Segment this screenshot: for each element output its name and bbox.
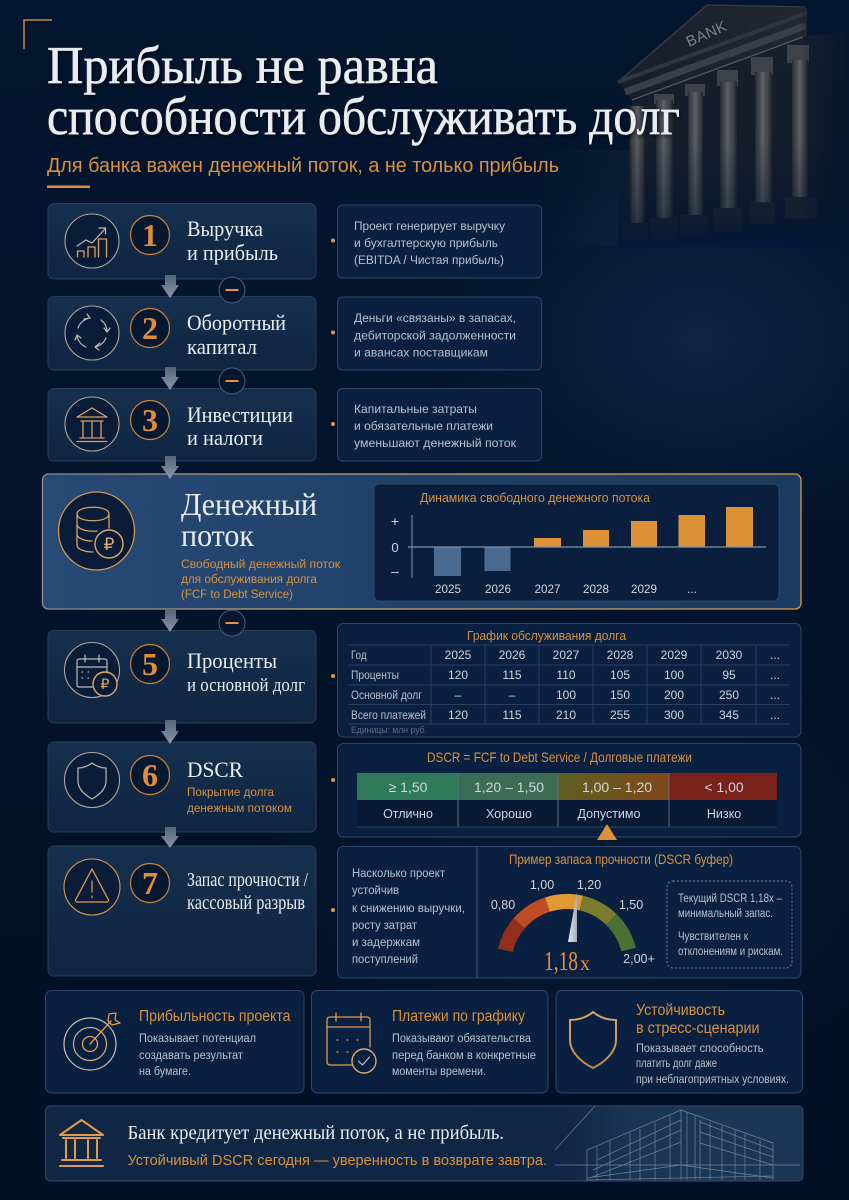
table: payments: 210 <box>556 708 576 722</box>
gauge: DSCR 1.18x: 1,20 <box>577 878 601 892</box>
table: payments: 120 <box>448 708 468 722</box>
table: payments: 95 <box>722 668 736 682</box>
table: DSCR ranges: Низко <box>707 807 741 821</box>
card: stress resilience: Показывает способность <box>636 1043 764 1055</box>
step 1 card: 1 <box>142 217 158 253</box>
panel: safety margin: к снижению выручки, <box>352 901 465 915</box>
table: payments: Проценты <box>351 668 399 682</box>
table: DSCR ranges: 1,00 – 1,20 <box>582 779 652 795</box>
table: payments: 100 <box>664 668 684 682</box>
card: project profitability: Прибыльность проекта <box>139 1008 291 1025</box>
gauge: DSCR 1.18x <box>491 878 655 976</box>
image: bank building <box>540 0 849 247</box>
step 3 card: и налоги <box>187 425 263 450</box>
step 2 note: Деньги «связаны» в запасах, <box>354 311 516 325</box>
gauge: DSCR 1.18x: 2,00+ <box>623 952 655 966</box>
image: wireframe building <box>555 1106 800 1180</box>
step 7 card: 7 <box>142 865 158 901</box>
step 6 card <box>48 742 316 832</box>
step 3 note: уменьшают денежный поток <box>354 436 517 450</box>
panel: debt service schedule: Единицы: млн руб. <box>351 725 427 736</box>
table: DSCR ranges: Допустимо <box>578 807 641 821</box>
chart: free cash flow: 2028 <box>583 582 609 596</box>
step 1 card: Выручка <box>187 216 263 241</box>
gauge: DSCR 1.18x: 1,00 <box>530 878 554 892</box>
arrow: step 2 to 3 <box>161 367 179 390</box>
table: payments: 250 <box>719 688 739 702</box>
gauge: DSCR 1.18x: 1,50 <box>619 898 643 912</box>
icon: growth chart <box>65 214 119 268</box>
step 2 note: и авансах поставщикам <box>354 346 488 360</box>
step 5 card: Проценты <box>187 648 277 673</box>
card: project profitability: Показывает потенциал <box>139 1033 256 1045</box>
minus sign 1 <box>219 277 245 303</box>
table: payments: 2027 <box>553 648 580 662</box>
step 2 card: 2 <box>142 310 158 346</box>
subtitle: Для банка важен денежный поток, а не только прибыль <box>47 155 559 177</box>
table: payments: 100 <box>556 688 576 702</box>
table: DSCR ranges <box>357 773 777 827</box>
banner: conclusion: Банк кредитует денежный поток, а не прибыль. <box>128 1122 504 1144</box>
arrow: cash flow to step 5 <box>161 610 179 632</box>
table: DSCR ranges: 1,20 – 1,50 <box>474 779 544 795</box>
banner: conclusion <box>46 1106 803 1181</box>
card: project profitability: создавать результат <box>139 1050 244 1062</box>
table: payments: 255 <box>610 708 630 722</box>
gauge: DSCR 1.18x: 0,80 <box>491 898 515 912</box>
step 2 note: дебиторской задолженности <box>354 328 516 342</box>
callout: current DSCR: Чувствителен к <box>678 931 749 943</box>
table: payments: 300 <box>664 708 684 722</box>
table: DSCR ranges: < 1,00 <box>704 779 744 795</box>
icon: bank <box>60 1120 103 1166</box>
card: scheduled payments: Платежи по графику <box>392 1008 525 1025</box>
chart: free cash flow: 2029 <box>631 582 657 596</box>
chart: free cash flow: 2027 <box>534 582 561 596</box>
panel: DSCR scale: DSCR = FCF to Debt Service / Долговые платежи <box>427 749 692 765</box>
table: payments: ... <box>770 668 780 682</box>
table: payments: Год <box>351 648 366 662</box>
table: payments: 2025 <box>445 648 472 662</box>
chart: free cash flow: + <box>391 513 399 529</box>
table: payments: Всего платежей <box>351 708 426 722</box>
step 1 note: Проект генерирует выручку <box>354 219 506 233</box>
panel: cash flow: поток <box>181 517 254 553</box>
icon: coins with ruble: ₽ <box>104 535 115 554</box>
subtitle underline <box>47 186 90 188</box>
chart: free cash flow: 0 <box>391 540 399 555</box>
panel: DSCR scale <box>331 744 801 837</box>
card: scheduled payments <box>312 990 548 1093</box>
chart: free cash flow: Динамика свободного денежного потока <box>420 491 650 505</box>
card: stress resilience: при неблагоприятных условиях. <box>636 1074 789 1086</box>
card: stress resilience <box>556 990 802 1093</box>
chart: free cash flow: ... <box>687 582 697 596</box>
corner accent <box>24 20 52 49</box>
arrow: step 1 to 2 <box>161 275 179 298</box>
table: payments: 150 <box>610 688 630 702</box>
title: Прибыль не равна <box>47 37 438 95</box>
table: payments <box>348 645 790 724</box>
panel: safety margin: росту затрат <box>352 918 417 932</box>
table: payments: – <box>455 688 462 702</box>
step 3 card: 3 <box>142 402 158 438</box>
callout: current DSCR <box>667 881 792 968</box>
step 3 card <box>48 388 316 461</box>
card: stress resilience: Устойчивость <box>636 1002 725 1019</box>
step 2 card <box>48 296 316 370</box>
icon: bank <box>65 397 119 451</box>
table: payments: ... <box>770 688 780 702</box>
step 5 card: и основной долг <box>187 675 305 696</box>
icon: calendar with check <box>327 1013 376 1073</box>
table: payments: – <box>509 688 516 702</box>
minus sign 3 <box>219 610 245 636</box>
chart: free cash flow: 2026 <box>485 582 511 596</box>
step 1 card <box>48 204 316 279</box>
table: payments: 345 <box>719 708 739 722</box>
table: DSCR ranges: Хорошо <box>486 807 532 821</box>
step 3 card: Инвестиции <box>187 402 293 427</box>
step 2 note <box>331 297 542 370</box>
step 7 card: кассовый разрыв <box>187 892 305 914</box>
icon: cycle <box>65 306 119 360</box>
panel: safety margin: Пример запаса прочности (DSCR буфер) <box>509 852 733 867</box>
icon: calendar with ruble: ₽ <box>101 676 110 692</box>
table: DSCR ranges: ≥ 1,50 <box>389 779 428 795</box>
panel: cash flow: для обслуживания долга <box>181 572 317 586</box>
card: scheduled payments: Показывают обязательства <box>392 1033 532 1045</box>
table: payments: 110 <box>556 668 576 682</box>
icon: large shield <box>570 1012 616 1068</box>
step 7 card <box>48 846 316 976</box>
minus sign 2 <box>219 368 245 394</box>
chart: free cash flow <box>374 484 779 601</box>
panel: safety margin: и задержкам <box>352 935 420 949</box>
table: payments: 115 <box>502 668 522 682</box>
panel: safety margin <box>331 846 801 978</box>
step 1 note: и бухгалтерскую прибыль <box>354 236 498 250</box>
step 3 note <box>331 388 542 461</box>
table: payments: ... <box>770 708 780 722</box>
card: project profitability <box>46 990 304 1093</box>
banner: conclusion: Устойчивый DSCR сегодня — уверенность в возврате завтра. <box>128 1153 547 1169</box>
step 3 note: Капитальные затраты <box>354 402 477 416</box>
table: payments: 2030 <box>716 648 743 662</box>
panel: cash flow: Свободный денежный поток <box>181 557 341 571</box>
table: DSCR ranges: Отлично <box>383 807 433 821</box>
triangle marker <box>597 824 617 840</box>
card: stress resilience: платить долг даже <box>636 1058 717 1070</box>
panel: debt service schedule <box>331 624 801 737</box>
table: payments: 115 <box>502 708 522 722</box>
panel: safety margin: поступлений <box>352 952 418 966</box>
card: project profitability: на бумаге. <box>139 1066 191 1078</box>
panel: safety margin: Насколько проект <box>352 866 445 880</box>
step 1 note <box>331 205 542 278</box>
panel: cash flow: Денежный <box>181 486 317 522</box>
step 1 note: (EBITDA / Чистая прибыль) <box>354 253 504 267</box>
step 6 card: DSCR <box>187 757 243 782</box>
step 5 card <box>48 630 316 723</box>
chart: free cash flow: – <box>391 563 399 579</box>
icon: shield <box>64 752 120 808</box>
table: payments: 2028 <box>607 648 634 662</box>
table: payments: ... <box>770 648 780 662</box>
step 7 card: Запас прочности / <box>187 869 308 891</box>
icon: warning <box>64 859 120 915</box>
step 5 card: 5 <box>142 646 158 682</box>
icon: target <box>64 1013 120 1070</box>
chart: free cash flow: 2025 <box>435 582 461 596</box>
callout: current DSCR: минимальный запас. <box>678 908 773 920</box>
panel: cash flow: (FCF to Debt Service) <box>181 587 293 601</box>
table: payments: 200 <box>664 688 684 702</box>
table: payments: 105 <box>610 668 630 682</box>
table: payments: Основной долг <box>351 688 423 702</box>
step 6 card: Покрытие долга <box>187 785 274 799</box>
step 6 card: 6 <box>142 757 158 793</box>
table: payments: 120 <box>448 668 468 682</box>
panel: cash flow <box>42 474 801 609</box>
icon: coins with ruble <box>58 492 134 570</box>
gauge: DSCR 1.18x: 1,18 <box>544 946 578 976</box>
table: payments: 2029 <box>661 648 688 662</box>
card: stress resilience: в стресс-сценарии <box>636 1020 760 1037</box>
callout: current DSCR: отклонениям и рискам. <box>678 946 783 958</box>
step 3 note: и обязательные платежи <box>354 419 493 433</box>
table: payments: 2026 <box>499 648 526 662</box>
step 6 card: денежным потоком <box>187 801 292 815</box>
step 1 card: и прибыль <box>187 240 278 265</box>
title: способности обслуживать долг <box>47 88 680 146</box>
arrow: step 6 to 7 <box>161 827 179 848</box>
card: scheduled payments: моменты времени. <box>392 1066 486 1078</box>
step 2 card: капитал <box>187 334 257 359</box>
card: scheduled payments: перед банком в конкретные <box>392 1050 536 1062</box>
callout: current DSCR: Текущий DSCR 1,18x – <box>678 893 783 905</box>
icon: calendar with ruble <box>64 642 120 698</box>
arrow: step 3 to cash flow <box>161 456 179 479</box>
gauge: DSCR 1.18x: x <box>580 953 590 975</box>
title <box>47 37 680 146</box>
step 2 card: Оборотный <box>187 310 286 335</box>
image: bank building: BANK <box>684 18 730 51</box>
panel: debt service schedule: График обслуживания долга <box>467 629 626 643</box>
arrow: step 5 to 6 <box>161 720 179 744</box>
panel: safety margin: устойчив <box>352 883 399 897</box>
